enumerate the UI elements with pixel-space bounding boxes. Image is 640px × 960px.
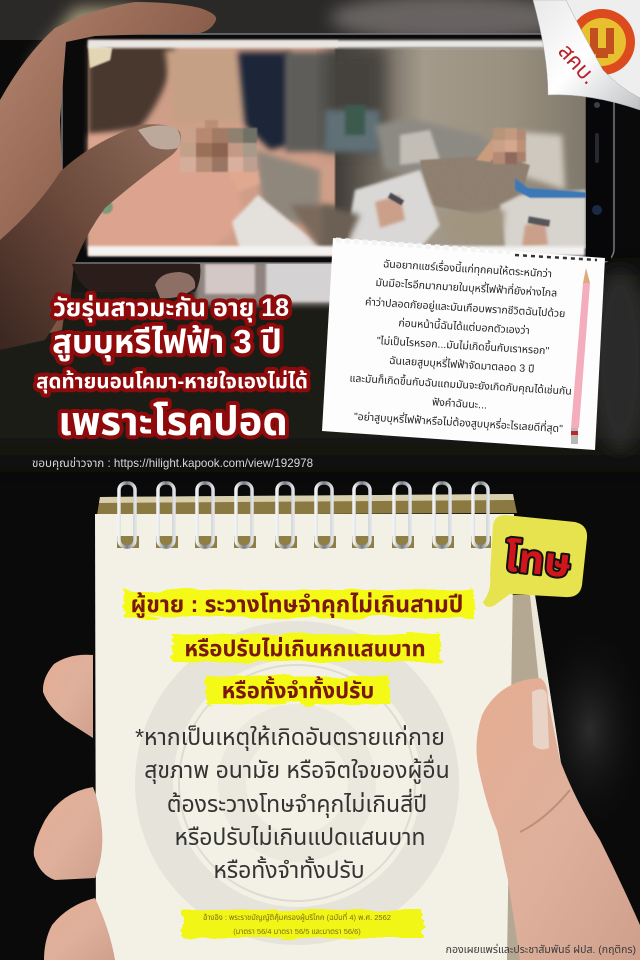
hand holding phone <box>0 2 216 350</box>
note text: และมันก็เกิดขึ้นกับฉันแถมมันจะยังเกิดกับคุณได้เช่นกัน <box>349 371 572 398</box>
note text: ก่อนหน้านี้ฉันได้แต่บอกตัวเองว่า <box>398 315 530 337</box>
note text: ฟังคำฉันนะ... <box>432 396 487 412</box>
watermark seal <box>154 640 440 926</box>
seller penalty highlighted: หรือปรับไม่เกินหกแสนบาท <box>184 636 426 661</box>
note text: ฉันอยากแชร์เรื่องนี้แก่ทุกคนให้ตระหนักว่า <box>383 256 552 280</box>
additional penalty text: สุขภาพ อนามัย หรือจิตใจของผู้อื่น <box>144 754 450 785</box>
legal reference: อ้างอิง : พระราชบัญญัติคุ้มครองผู้บริโภค (ฉบับที่ 4) พ.ศ. 2562 <box>203 912 391 923</box>
right thumb holding notebook <box>476 678 640 960</box>
seller penalty highlighted: หรือทั้งจำทั้งปรับ <box>222 676 374 703</box>
notebook <box>95 483 562 960</box>
corner page curl with seal <box>533 0 640 110</box>
note text: คำว่าปลอดภัยอยู่และมันเกือบพรากชีวิตฉันไปด้วย <box>365 295 566 320</box>
headline: สุดท้ายนอนโคมา-หายใจเองไม่ได้ <box>36 370 308 394</box>
seller penalty highlighted: ผู้ขาย : ระวางโทษจำคุกไม่เกินสามปี <box>131 591 463 618</box>
patient's gown below phone <box>195 260 336 305</box>
headline: สูบบุหรีไฟฟ้า 3 ปี <box>52 323 282 362</box>
phone side camera strip <box>586 95 611 261</box>
phone <box>62 34 614 263</box>
note text: "ไม่เป็นไรหรอก...มันไม่เกิดขึ้นกับเราหรอก" <box>376 333 550 357</box>
phone screen photo: patient's face close-up <box>88 40 340 256</box>
palm and index finger <box>0 2 216 345</box>
headline: วัยรุ่นสาวมะกัน อายุ 18 <box>53 294 289 323</box>
additional penalty text: หรือปรับไม่เกินแปดแสนบาท <box>175 824 425 850</box>
fingers behind phone <box>72 264 200 292</box>
gold cover band <box>97 494 517 515</box>
thumbnail <box>532 689 549 749</box>
note text: ฉันเลยสูบบุหรี่ไฟฟ้าจัดมาตลอด 3 ปี <box>389 353 535 375</box>
spiral binding rings <box>117 483 491 548</box>
additional penalty text: หรือทั้งจำทั้งปรับ <box>213 855 365 883</box>
legal reference: (มาตรา 56/4 มาตรา 56/5 และมาตรา 56/6) <box>233 927 361 936</box>
additional penalty text: ต้องระวางโทษจำคุกไม่เกินสี่ปี <box>167 788 427 818</box>
note text: มันมีอะไรอีกมากมายในบุหรี่ไฟฟ้าที่ยังห่างไกล <box>375 275 558 300</box>
headline: เพราะโรคปอด <box>58 400 288 444</box>
news source credit: ขอบคุณข่าวจาก : https://hilight.kapook.com/view/192978 <box>32 456 313 470</box>
page <box>95 514 514 960</box>
additional penalty text: *หากเป็นเหตุให้เกิดอันตรายแก่กาย <box>135 724 445 751</box>
seller penalty highlighted <box>124 590 474 704</box>
headline <box>36 294 308 444</box>
note text: "อย่าสูบบุหรี่ไฟฟ้าหรือไม่ต้องสูบบุหรี่อะไรเลยดีที่สุด" <box>354 409 564 435</box>
label: agency abbreviation: สคบ. <box>553 39 602 89</box>
pixelated face mosaic <box>180 120 257 172</box>
note text <box>347 255 579 436</box>
legal reference <box>183 910 423 938</box>
pasted note <box>322 238 605 450</box>
left hand fingers holding notebook <box>34 655 115 960</box>
thumbnail <box>138 125 181 149</box>
additional penalty text <box>135 724 450 883</box>
screen glare bars <box>88 40 588 256</box>
back pages strip <box>505 595 562 770</box>
thumb <box>0 124 181 350</box>
penalty speech bubble <box>483 515 587 607</box>
phone screen photo: patient in hospital bed <box>322 48 586 248</box>
publisher credit: กองเผยแพร่และประชาสัมพันธ์ ฝปส. (กฤติกร) <box>446 943 636 956</box>
label: penalty: โทษ <box>502 536 573 586</box>
icon: pink pencil <box>571 268 590 444</box>
